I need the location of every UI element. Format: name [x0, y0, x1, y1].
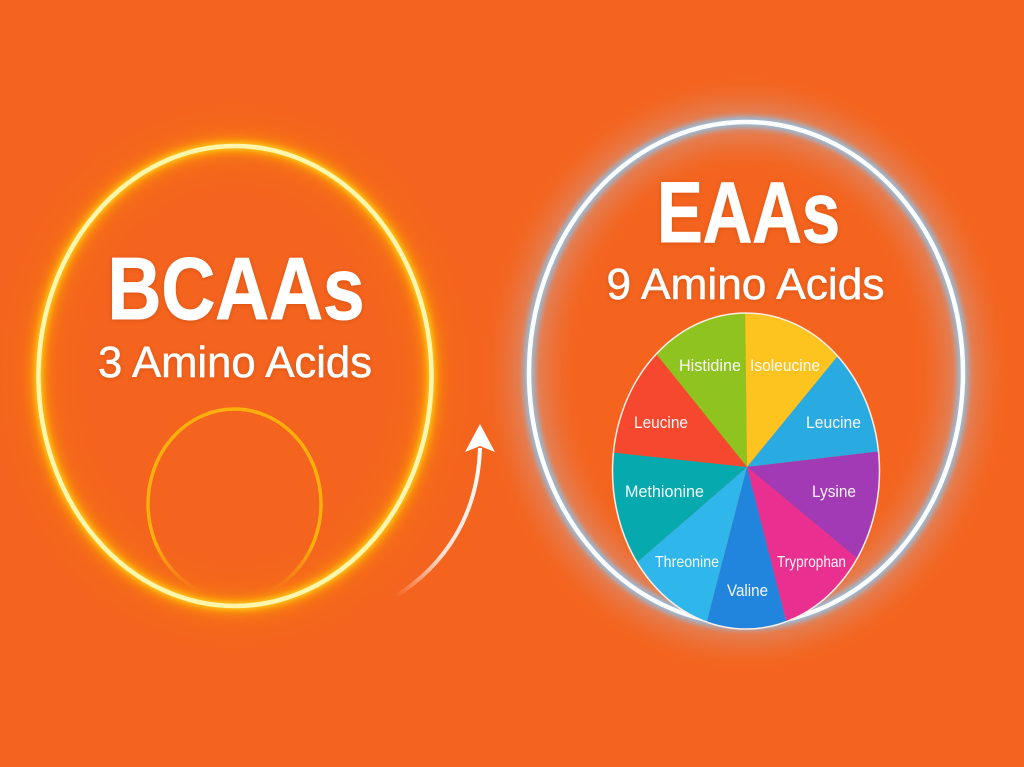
pie labels: Methionine: [625, 482, 704, 501]
slice: Methionine: [613, 452, 747, 562]
subheading: 3 Amino Acids: 3 Amino Acids: [98, 338, 372, 387]
slice: Tryptophan: [747, 467, 856, 621]
pie labels: Histidine: [679, 356, 741, 375]
slice: Lysine: [747, 452, 879, 558]
slice: Valine: [707, 467, 786, 628]
pie outline: [612, 313, 880, 629]
heading: EAAs: EAAs: [657, 165, 840, 261]
pie labels: Isoleucine: [750, 356, 820, 375]
pie labels: Valine: [727, 581, 768, 600]
panel: EAAs ring: [529, 122, 963, 624]
chart: amino acid pie: [612, 312, 880, 630]
slice: Isoleucine: [745, 314, 838, 467]
pie labels: [625, 356, 861, 600]
pie labels: Leucine: [806, 413, 861, 432]
pie labels: Leucine: [634, 413, 688, 432]
pie labels: Threonine: [655, 554, 719, 571]
pie labels: Lysine: [812, 482, 856, 501]
pie labels: Tryprophan: [777, 554, 846, 571]
subheading: 9 Amino Acids: 9 Amino Acids: [606, 260, 884, 309]
arrow: BCAAs to EAAs: [396, 424, 495, 596]
slice: Histidine: [656, 314, 747, 467]
infographic: BCAAs vs EAAs: [22, 88, 997, 658]
slice: Leucine left: [614, 354, 747, 467]
slice: Leucine right: [747, 356, 878, 467]
icon: inner BCAA circle: [148, 409, 321, 599]
panel: BCAAs ring: [38, 146, 432, 606]
heading: BCAAs: BCAAs: [108, 239, 364, 338]
slice: Threonine: [638, 467, 747, 622]
